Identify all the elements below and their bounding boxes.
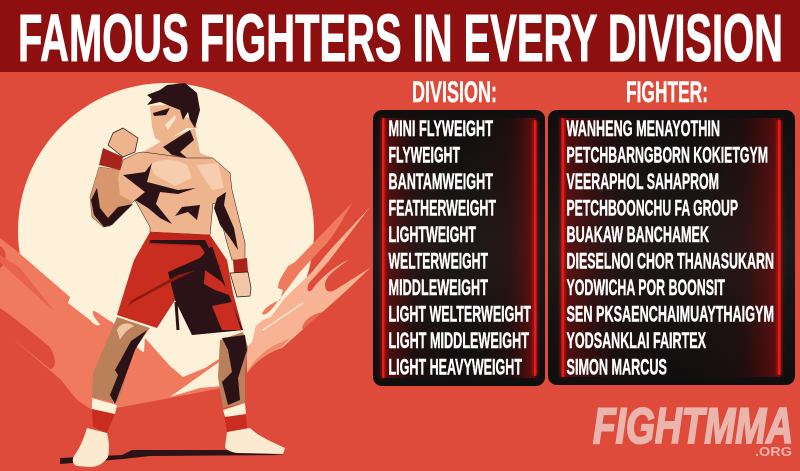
- brow and eye: [153, 108, 170, 116]
- ground shadow: [60, 450, 285, 464]
- shorts left leg: [117, 232, 243, 335]
- panel: divisions: [373, 110, 545, 386]
- neck: [143, 128, 213, 160]
- logo: FightMMA.org: .ORG: [755, 445, 792, 459]
- left forearm shade: [90, 167, 133, 227]
- right sock: [223, 403, 247, 432]
- division list: FEATHERWEIGHT: [388, 196, 496, 220]
- fighter list: [566, 116, 774, 380]
- torso shadows: [123, 163, 196, 224]
- right fist: [230, 272, 251, 297]
- header band: [0, 0, 800, 72]
- column heading: division: DIVISION:: [412, 76, 497, 109]
- right sock band: [223, 403, 246, 417]
- shorts fold shadow: [128, 270, 196, 305]
- division list: [388, 116, 531, 380]
- division list: WELTERWEIGHT: [388, 248, 488, 274]
- division list: LIGHTWEIGHT: [388, 222, 476, 247]
- right flame burst: [247, 203, 370, 373]
- neck shadow: [163, 130, 194, 158]
- fighter list: SIMON MARCUS: [566, 354, 667, 380]
- left leg shadows: [110, 330, 147, 404]
- shorts dark right leg: [168, 245, 243, 335]
- division list: FLYWEIGHT: [388, 142, 460, 168]
- left flame burst: [0, 238, 240, 420]
- left wristband: [99, 148, 123, 170]
- fist: [108, 128, 138, 157]
- division list: LIGHT MIDDLEWEIGHT: [388, 328, 529, 353]
- left sock: [92, 398, 117, 433]
- face highlight: [165, 115, 176, 130]
- chest highlight: [150, 160, 224, 190]
- division list: MIDDLEWEIGHT: [388, 275, 488, 300]
- sun circle: [18, 83, 314, 379]
- left leg: [92, 317, 150, 403]
- right leg: [218, 332, 248, 408]
- torso and arms skin: [90, 152, 245, 260]
- right shoe: [225, 428, 285, 454]
- shorts red folds: [204, 270, 241, 330]
- panel: fighters: [548, 110, 795, 385]
- hair: [147, 83, 200, 128]
- short string: [176, 302, 178, 330]
- division list: MINI FLYWEIGHT: [388, 116, 493, 141]
- column heading: fighter: FIGHTER:: [626, 76, 708, 109]
- face: [150, 104, 197, 143]
- hills between legs: [60, 268, 372, 471]
- division list: BANTAMWEIGHT: [388, 169, 493, 194]
- left leg highlight: [117, 323, 134, 340]
- waistband ties: [150, 240, 222, 268]
- division list: LIGHT HEAVYWEIGHT: [388, 354, 522, 380]
- right wristband: [233, 258, 248, 273]
- shorts waistband: [148, 232, 213, 247]
- right leg shadows: [222, 335, 247, 405]
- division list: LIGHT WELTERWEIGHT: [388, 302, 531, 326]
- fighter illustration: [60, 83, 285, 467]
- left sock band: [92, 398, 117, 414]
- right arm shadow: [214, 192, 238, 250]
- left shoe: [73, 428, 109, 467]
